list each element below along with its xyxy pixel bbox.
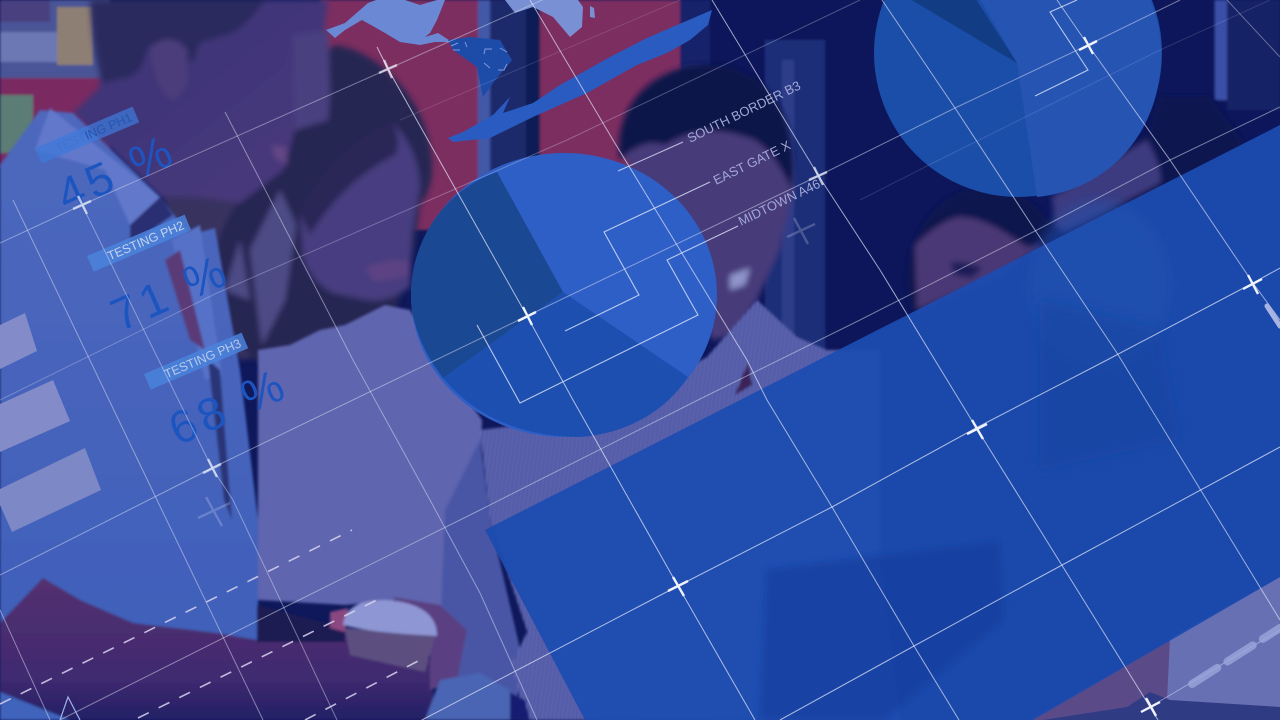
label: east gate x: EAST GATE X [711,137,793,188]
world map [326,0,712,142]
pie chart: top right [874,0,1162,197]
pie chart: centre [411,153,717,437]
label: testing ph2: TESTING PH2 [105,218,186,263]
label: south border b3: SOUTH BORDER B3 [685,78,803,146]
value: 68 percent: 68 % [161,357,296,455]
map: africa [505,0,583,37]
dashed trend upper [0,530,352,704]
south border leader [618,142,683,171]
map: focus brackets [451,42,507,70]
man one collar [35,108,160,225]
pie wedge: dark [411,172,563,378]
man two sleeve [440,440,525,720]
map: madagascar [590,6,595,18]
testing percentages [35,107,296,455]
dashed trend lines [0,530,420,720]
dashed trend lower [138,596,385,718]
map: asia stripe [448,10,712,142]
map: south america [448,37,512,97]
bar two [0,380,70,452]
panel shade: tablet [760,540,1005,720]
label: testing ph2 [87,215,191,272]
triangle marker [60,697,80,720]
top right pie overlay outline [1035,0,1088,96]
pie wedge: light [975,0,1161,197]
pie wedge: dark [895,0,1017,63]
man three shirt [480,300,900,720]
dashed trend right [1192,628,1280,684]
man two hair and head [217,45,432,375]
map: north america [326,0,452,45]
man two shirt [258,305,482,610]
panel shade: face [1030,200,1170,370]
corner photo region [1030,577,1280,720]
women heads behind band [908,187,1058,320]
man three face and hair [620,65,794,340]
pie wedge: lower [443,292,688,437]
panel shade: arm [1040,300,1180,470]
blue diagonal panel [485,125,1280,720]
street labels [685,78,823,229]
man one lips [272,145,287,165]
bar three [0,448,101,532]
corner light panel [1167,577,1280,707]
paper cup [345,628,435,672]
value: 45 percent: 45 % [49,123,184,221]
label: midtown a46: MIDTOWN A46 [736,176,823,229]
value: 71 percent: 71 % [103,243,238,341]
centre pie overlay outline and midtown leader [477,226,738,403]
bar one [0,313,37,369]
bar chart [0,313,101,532]
arm and hands [0,578,435,720]
centre pie overlay outline and east gate leader [565,182,710,331]
dashed trend lowest [305,660,420,720]
man one head [73,0,330,203]
label: testing ph3: TESTING PH3 [162,336,243,381]
gap behind collar [160,160,300,360]
label: testing ph1 [35,107,139,164]
man one shirt [0,110,258,640]
man one placket [172,225,222,380]
label: testing ph1: TESTING PH1 [53,110,134,155]
label: testing ph3 [144,333,248,390]
edge tick right [1267,306,1280,326]
